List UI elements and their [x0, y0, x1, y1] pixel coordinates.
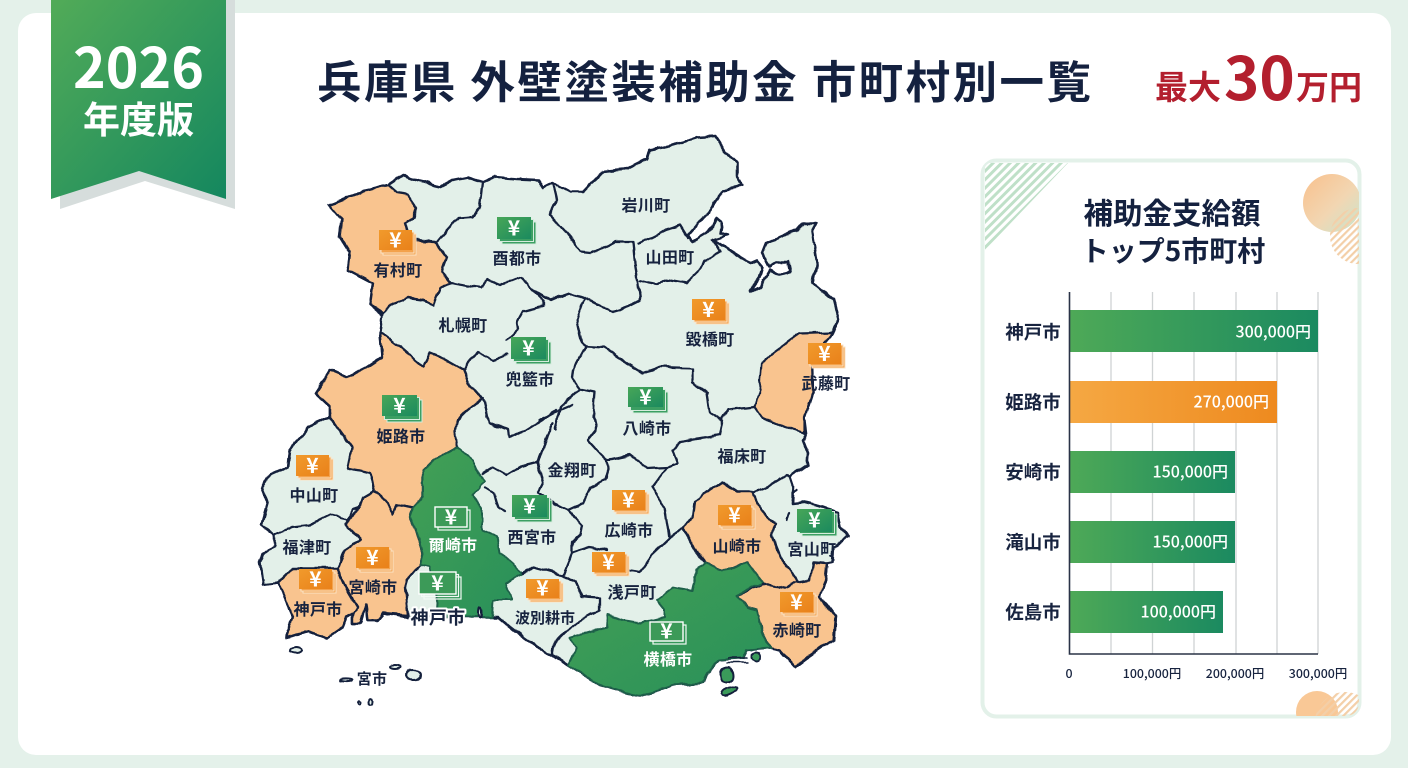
label: 広崎市 [605, 517, 653, 541]
icon: 有村町 money [379, 224, 416, 255]
icon: 毀橋町 money [692, 294, 729, 324]
icon: 浅戸町 money [592, 546, 629, 576]
icon: 兜籃市 money [511, 332, 551, 364]
icon: 姫路市 money: ¥ [393, 390, 406, 420]
label: 姫路市 [377, 423, 425, 447]
year ribbon badge [51, 0, 235, 209]
icon: 浅戸町 money: ¥ [602, 546, 615, 576]
icon: 兜籃市 money: ¥ [522, 332, 535, 362]
label: 酉都市 [493, 245, 541, 269]
label: 福床町 [718, 443, 766, 467]
bar: 安崎市: 安崎市 [1005, 459, 1061, 485]
bar: 姫路市 [1005, 381, 1277, 423]
icon: 爾崎市 money [435, 502, 470, 532]
ribbon suffix: 年度版 [83, 90, 194, 144]
prefecture silhouette [260, 137, 848, 695]
region: 神戸市 west [278, 568, 357, 638]
icon: 宮山町 money: ¥ [808, 504, 821, 534]
bar: 姫路市: 姫路市 [1005, 389, 1061, 415]
icon: 西宮市 money [512, 490, 552, 522]
icon: 山崎市 money: ¥ [728, 500, 741, 530]
panel: top 5 bar chart [980, 158, 1362, 718]
bar: 神戸市 [1005, 310, 1318, 352]
x axis labels: 0 [1065, 664, 1073, 682]
bar: 佐島市: 佐島市 [1005, 599, 1061, 625]
bar: 姫路市: 270,000円 [1194, 388, 1269, 412]
label: 兜籃市 [506, 366, 554, 390]
bar: 滝山市: 150,000円 [1152, 528, 1228, 552]
label: 武藤町 [802, 370, 850, 394]
label: 西宮市 [508, 524, 556, 548]
region: 爾崎市 [410, 447, 523, 617]
label: 爾崎市 [429, 532, 477, 556]
icon: 赤崎町 money [780, 586, 817, 616]
label: 八崎市 [623, 415, 671, 439]
title: 兵庫県 外壁塗装補助金 市町村別一覧 [317, 46, 1091, 111]
icon: 中山町 money [296, 450, 333, 480]
label: 神戸市 [294, 596, 342, 620]
label: 福津町 [283, 534, 331, 558]
icon: 毀橋町 money: ¥ [702, 294, 715, 324]
label: 神戸市 [411, 604, 465, 630]
label: 中山町 [290, 482, 338, 506]
municipality labels [283, 192, 850, 689]
label: 山崎市 [713, 533, 761, 557]
bar: 滝山市 [1005, 521, 1235, 563]
x axis labels: 200,000円 [1206, 664, 1264, 682]
icon: 姫路市 money [382, 390, 422, 422]
panel heading line 2: トップ5市町村 [1081, 230, 1265, 270]
icon: 有村町 money: ¥ [389, 224, 402, 254]
label: 札幌町 [439, 312, 487, 336]
label: 岩川町 [622, 192, 670, 216]
icon: 広崎市 money: ¥ [622, 484, 635, 514]
bar: 神戸市: 神戸市 [1005, 319, 1061, 345]
icon: 山崎市 money [718, 500, 755, 530]
max amount callout: 万円 [1296, 61, 1362, 109]
chart axes [1070, 292, 1318, 654]
bar: 佐島市 [1005, 591, 1223, 633]
region: 宮崎市 [337, 490, 423, 623]
region: 有村町 [329, 185, 451, 313]
label: 金翔町 [548, 457, 596, 481]
icon: 横橋市 money [650, 616, 686, 646]
x axis labels [1065, 664, 1347, 682]
icon: 横橋市 money: ¥ [660, 616, 673, 646]
max amount callout: 30 [1224, 31, 1295, 118]
icon: 赤崎町 money: ¥ [790, 586, 803, 616]
icon: 宮崎市 money: ¥ [366, 542, 379, 572]
label: 山田町 [646, 244, 694, 268]
icon: 神戸市 money: ¥ [431, 568, 444, 598]
icon: 広崎市 money [612, 484, 649, 514]
icon: 神戸市 west money: ¥ [309, 564, 322, 594]
bar: 安崎市: 150,000円 [1152, 458, 1228, 482]
bar: 安崎市 [1005, 451, 1235, 493]
map of municipalities [260, 137, 850, 705]
icon: 西宮市 money: ¥ [523, 490, 536, 520]
label: 宮山町 [788, 536, 836, 560]
region: 山崎市 and 赤崎町 [682, 482, 835, 667]
icon: 西都市 money [497, 212, 536, 244]
icon: 宮崎市 money [356, 542, 393, 572]
icon: 神戸市 money [419, 568, 461, 599]
label: 宮市 [357, 668, 387, 689]
ribbon year: 2026 [73, 24, 204, 104]
bar: 神戸市: 300,000円 [1236, 318, 1311, 342]
x axis labels: 300,000円 [1289, 664, 1347, 682]
label: 宮崎市 [349, 574, 397, 598]
label: 横橋市 [644, 646, 692, 670]
icon: 八崎市 money: ¥ [639, 382, 652, 412]
icon: 宮山町 money [797, 504, 837, 536]
label: 波別耕市 [515, 607, 575, 628]
icon: 八崎市 money [628, 382, 668, 413]
map land shapes [260, 137, 848, 705]
icon: 波別耕市 money: ¥ [536, 572, 549, 602]
municipal boundaries [275, 182, 797, 655]
bar: 佐島市: 100,000円 [1140, 598, 1216, 622]
panel heading: 補助金支給額 [1083, 191, 1261, 233]
icon: 武藤町 money [808, 338, 845, 368]
label: 有村町 [374, 257, 422, 281]
label: 赤崎町 [773, 617, 821, 641]
icon: 波別耕市 money [526, 572, 563, 602]
icon: 神戸市 west money [299, 564, 336, 594]
icon: 武藤町 money: ¥ [818, 338, 831, 368]
label: 浅戸町 [608, 579, 656, 603]
label: 毀橋町 [686, 326, 734, 350]
icon: 爾崎市 money: ¥ [445, 502, 458, 532]
icon: 中山町 money: ¥ [306, 450, 319, 480]
icon: 西都市 money: ¥ [508, 212, 521, 242]
islands [290, 608, 761, 705]
region: 横橋市 [568, 562, 770, 695]
panel decoration [985, 163, 1359, 716]
max amount callout: 最大 [1155, 61, 1221, 109]
bar: 滝山市: 滝山市 [1005, 529, 1061, 555]
grid lines [1111, 292, 1318, 654]
region: 姫路市 [315, 332, 483, 513]
x axis labels: 100,000円 [1123, 664, 1181, 682]
region: 武藤町 [755, 332, 832, 433]
